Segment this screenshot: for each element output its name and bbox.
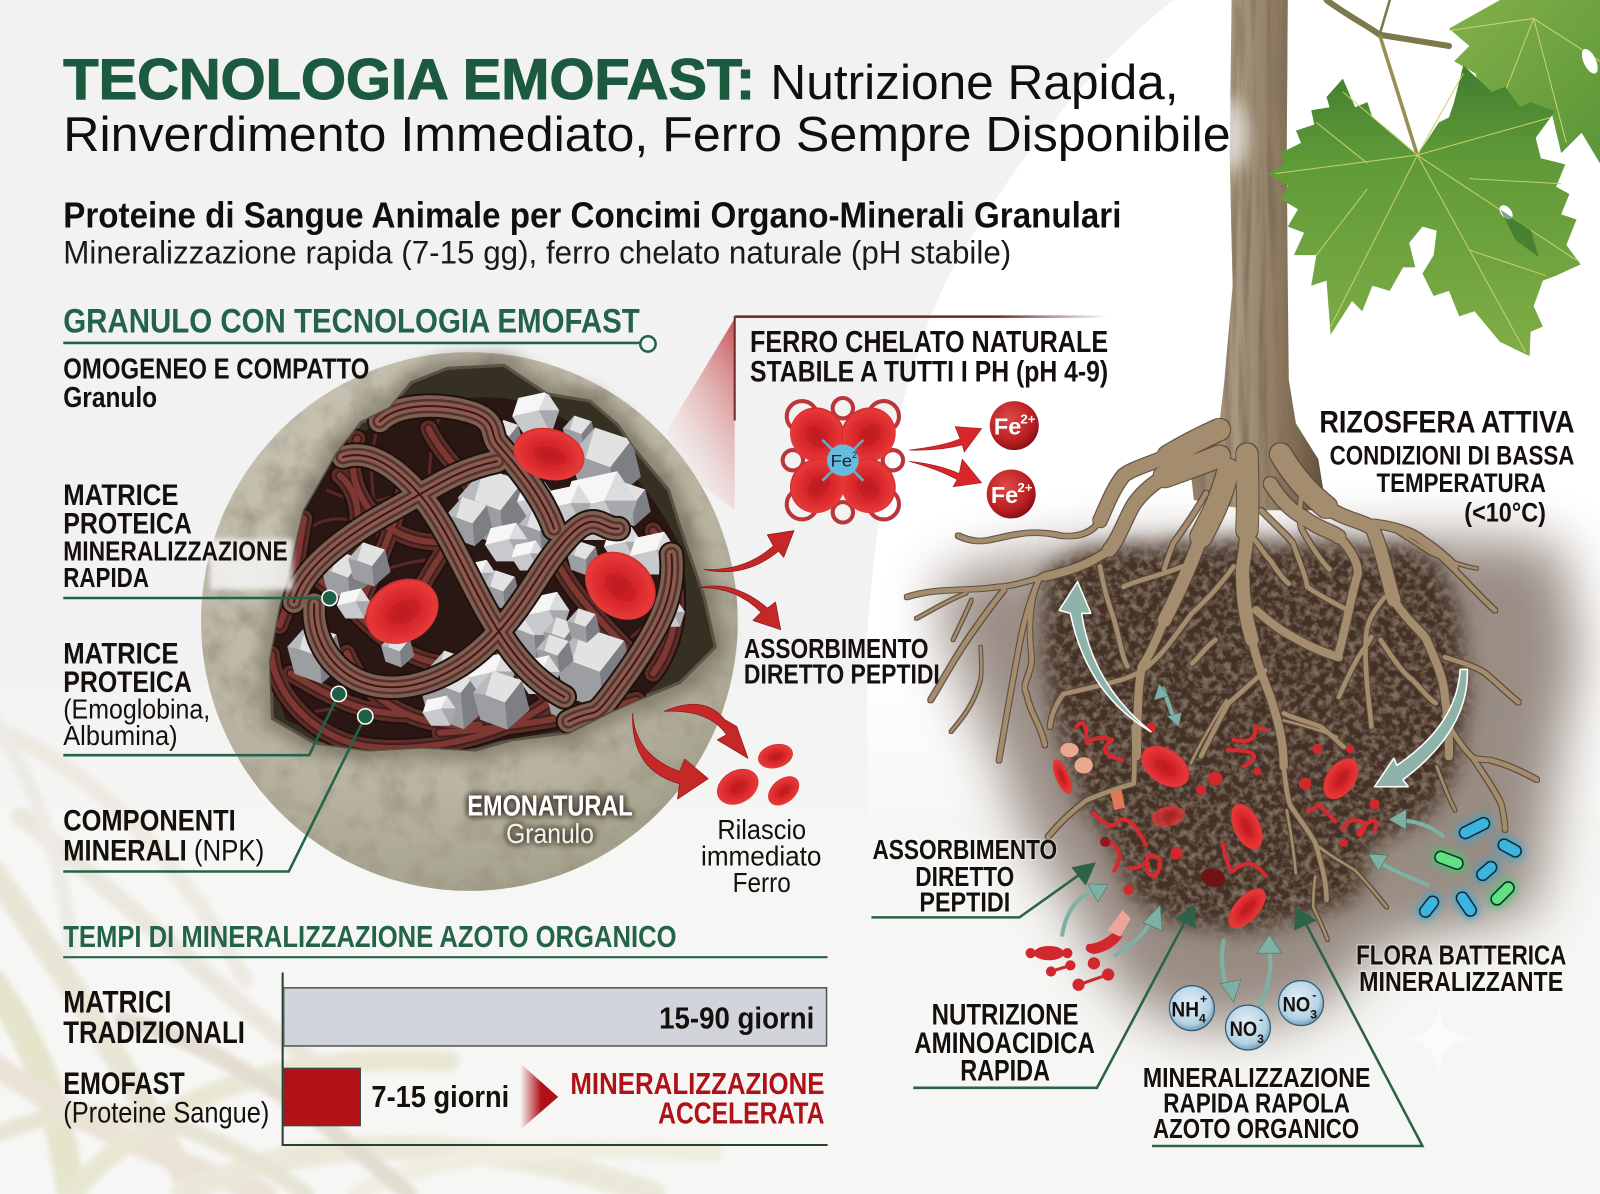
label: omogeneo: Granulo bbox=[63, 382, 157, 414]
red blood cells in granule bbox=[354, 420, 669, 657]
roots bbox=[907, 430, 1537, 940]
label: matrice emoglobina bbox=[63, 637, 346, 755]
subtitle: Mineralizzazione rapida (7-15 gg), ferro chelato naturale (pH stabile) bbox=[63, 233, 1011, 270]
label: assorbimento diretto peptidi (granule): ASSORBIMENTO bbox=[744, 633, 929, 664]
icon: chelated iron bbox=[779, 396, 907, 524]
text: accelerated bbox=[570, 1067, 824, 1131]
subtitle: Proteine di Sangue Animale per Concimi Organo-Minerali Granulari bbox=[63, 196, 1121, 236]
label: mineralizzazione azoto: AZOTO ORGANICO bbox=[1153, 1113, 1359, 1144]
label: matrice emoglobina: (Emoglobina, bbox=[63, 693, 210, 724]
peptide tube bbox=[1107, 910, 1131, 937]
label: matrice mineralizzazione bbox=[63, 479, 337, 606]
label: componenti minerali: COMPONENTI bbox=[63, 805, 236, 838]
title: Nutrizione Rapida, bbox=[770, 56, 1179, 110]
granule bbox=[201, 352, 738, 891]
panel: ferro chelato callout: STABILE A TUTTI I PH (pH 4-9) bbox=[750, 356, 1108, 389]
label: matrice mineralizzazione: MINERALIZZAZIONE bbox=[63, 535, 288, 566]
label: omogeneo: OMOGENEO E COMPATTO bbox=[63, 354, 369, 386]
label: omogeneo bbox=[63, 354, 369, 414]
icon: Fe2+ spheres: Fe bbox=[991, 482, 1018, 508]
panel: ferro chelato callout: FERRO CHELATO NATURALE bbox=[750, 325, 1108, 359]
arrows: iron release bbox=[909, 427, 982, 487]
row labels: (Proteine Sangue) bbox=[63, 1097, 269, 1130]
title: Rinverdimento Immediato, Ferro Sempre Disponibile bbox=[63, 108, 1231, 162]
heading: granule: GRANULO CON TECNOLOGIA EMOFAST bbox=[63, 303, 640, 341]
chart: mineralizzazione bbox=[63, 920, 828, 1145]
bacteria bbox=[1426, 824, 1515, 911]
nitrogen ions: NH bbox=[1171, 997, 1199, 1021]
label: rizosfera: (<10°C) bbox=[1464, 497, 1546, 527]
peptide bond strokes bbox=[1051, 965, 1108, 985]
label: rizosfera bbox=[1319, 404, 1574, 527]
nitrogen ions: 3 bbox=[1257, 1032, 1264, 1046]
label: rilascio bbox=[701, 814, 821, 898]
bar: traditional: 15-90 giorni bbox=[659, 1002, 814, 1036]
nitrogen ions: NO bbox=[1230, 1017, 1257, 1041]
label: mineralizzazione azoto bbox=[1143, 906, 1422, 1146]
icon: chelated iron: Fe bbox=[831, 452, 852, 470]
soil red blood cells bbox=[1049, 737, 1366, 935]
icon: Fe2+ spheres bbox=[987, 401, 1039, 518]
row labels: EMOFAST bbox=[63, 1065, 185, 1101]
label: matrice emoglobina: Albumina) bbox=[63, 720, 178, 751]
chart heading: TEMPI DI MINERALIZZAZIONE AZOTO ORGANICO bbox=[63, 920, 677, 954]
text: accelerated: MINERALIZZAZIONE bbox=[570, 1067, 824, 1101]
label: nutrizione aminoacidica: RAPIDA bbox=[960, 1055, 1050, 1088]
nitrogen ions: 3 bbox=[1310, 1007, 1317, 1021]
vine branch bbox=[1327, 0, 1449, 155]
protein matrix and minerals bbox=[270, 392, 686, 748]
label: assorbimento diretto peptidi (soil) bbox=[871, 834, 1096, 917]
label: emonatural bbox=[467, 790, 633, 849]
label: mineralizzazione azoto: MINERALIZZAZIONE bbox=[1143, 1062, 1370, 1093]
label: rizosfera: TEMPERATURA bbox=[1377, 468, 1546, 498]
icon: Fe2+ spheres: Fe bbox=[994, 414, 1021, 440]
label: assorbimento diretto peptidi (soil): ASSORBIMENTO bbox=[872, 834, 1057, 865]
nitrogen ions: + bbox=[1200, 992, 1207, 1006]
label: assorbimento diretto peptidi (soil): PEPTIDI bbox=[919, 886, 1010, 917]
row labels: TRADIZIONALI bbox=[63, 1014, 245, 1050]
title: TECNOLOGIA EMOFAST: bbox=[63, 48, 755, 112]
tree trunk bbox=[1189, 0, 1327, 510]
row labels: MATRICI bbox=[63, 983, 171, 1019]
arrow: acceleration bbox=[520, 1063, 558, 1130]
label: mineralizzazione azoto: RAPIDA RAPOLA bbox=[1163, 1087, 1350, 1118]
peptide fragments bbox=[1026, 723, 1380, 991]
label: nutrizione aminoacidica: NUTRIZIONE bbox=[932, 999, 1079, 1032]
icon: Fe2+ spheres: 2+ bbox=[1020, 412, 1036, 427]
label: rilascio: immediato bbox=[701, 840, 821, 871]
label: rilascio: Rilascio bbox=[717, 814, 806, 845]
row labels bbox=[63, 983, 269, 1130]
nitrogen ions: 4 bbox=[1199, 1012, 1206, 1026]
text: accelerated: ACCELERATA bbox=[658, 1097, 824, 1131]
arrows: small teal bbox=[1062, 684, 1443, 1006]
sparkle bbox=[1405, 1005, 1472, 1074]
nitrogen ions: - bbox=[1312, 988, 1316, 1002]
label: flora batterica: MINERALIZZANTE bbox=[1359, 966, 1563, 997]
bar: traditional bbox=[284, 988, 827, 1046]
soil mass bbox=[939, 538, 1582, 1028]
title bbox=[63, 48, 1231, 162]
leaf: large bbox=[1268, 65, 1581, 356]
bar: emofast: 7-15 giorni bbox=[371, 1080, 509, 1114]
icon: Fe2+ spheres: 2+ bbox=[1017, 480, 1033, 495]
released red blood cells bbox=[711, 740, 805, 812]
label: assorbimento diretto peptidi (granule): DIRETTO PEPTIDI bbox=[744, 659, 940, 690]
subtitle bbox=[63, 196, 1121, 270]
label: matrice mineralizzazione: RAPIDA bbox=[63, 562, 149, 593]
bar: emofast bbox=[284, 1068, 509, 1126]
label: rilascio: Ferro bbox=[733, 867, 791, 898]
nitrogen ions: - bbox=[1259, 1013, 1263, 1027]
label: matrice emoglobina: PROTEICA bbox=[63, 666, 192, 699]
label: assorbimento diretto peptidi (soil): DIRETTO bbox=[915, 861, 1014, 892]
label: matrice mineralizzazione: MATRICE bbox=[63, 479, 179, 512]
background strands bbox=[0, 714, 714, 1194]
nitrogen ions: NO bbox=[1283, 992, 1310, 1016]
label: matrice mineralizzazione: PROTEICA bbox=[63, 508, 192, 541]
label: emonatural: Granulo bbox=[506, 818, 594, 849]
label: assorbimento diretto peptidi (granule) bbox=[744, 633, 940, 690]
heading: granule bbox=[63, 303, 656, 352]
arrows: pale teal flows bbox=[1059, 582, 1467, 787]
leaf: upper right bbox=[1449, 0, 1600, 163]
peptides bbox=[1077, 723, 1377, 877]
label: nutrizione aminoacidica: AMINOACIDICA bbox=[914, 1027, 1095, 1060]
label: emonatural: EMONATURAL bbox=[467, 790, 633, 822]
label: flora batterica bbox=[1356, 939, 1566, 997]
icon: chelated iron: 2 bbox=[852, 450, 857, 460]
panel: ferro chelato callout bbox=[665, 315, 1108, 524]
arrows: from granule bbox=[633, 531, 794, 799]
label: componenti minerali bbox=[63, 709, 373, 871]
label: componenti minerali: (NPK) bbox=[194, 834, 264, 867]
label: componenti minerali: MINERALI bbox=[63, 834, 187, 867]
label: matrice emoglobina: MATRICE bbox=[63, 637, 179, 670]
label: nutrizione aminoacidica bbox=[913, 904, 1196, 1088]
nitrogen ions bbox=[1169, 981, 1323, 1050]
